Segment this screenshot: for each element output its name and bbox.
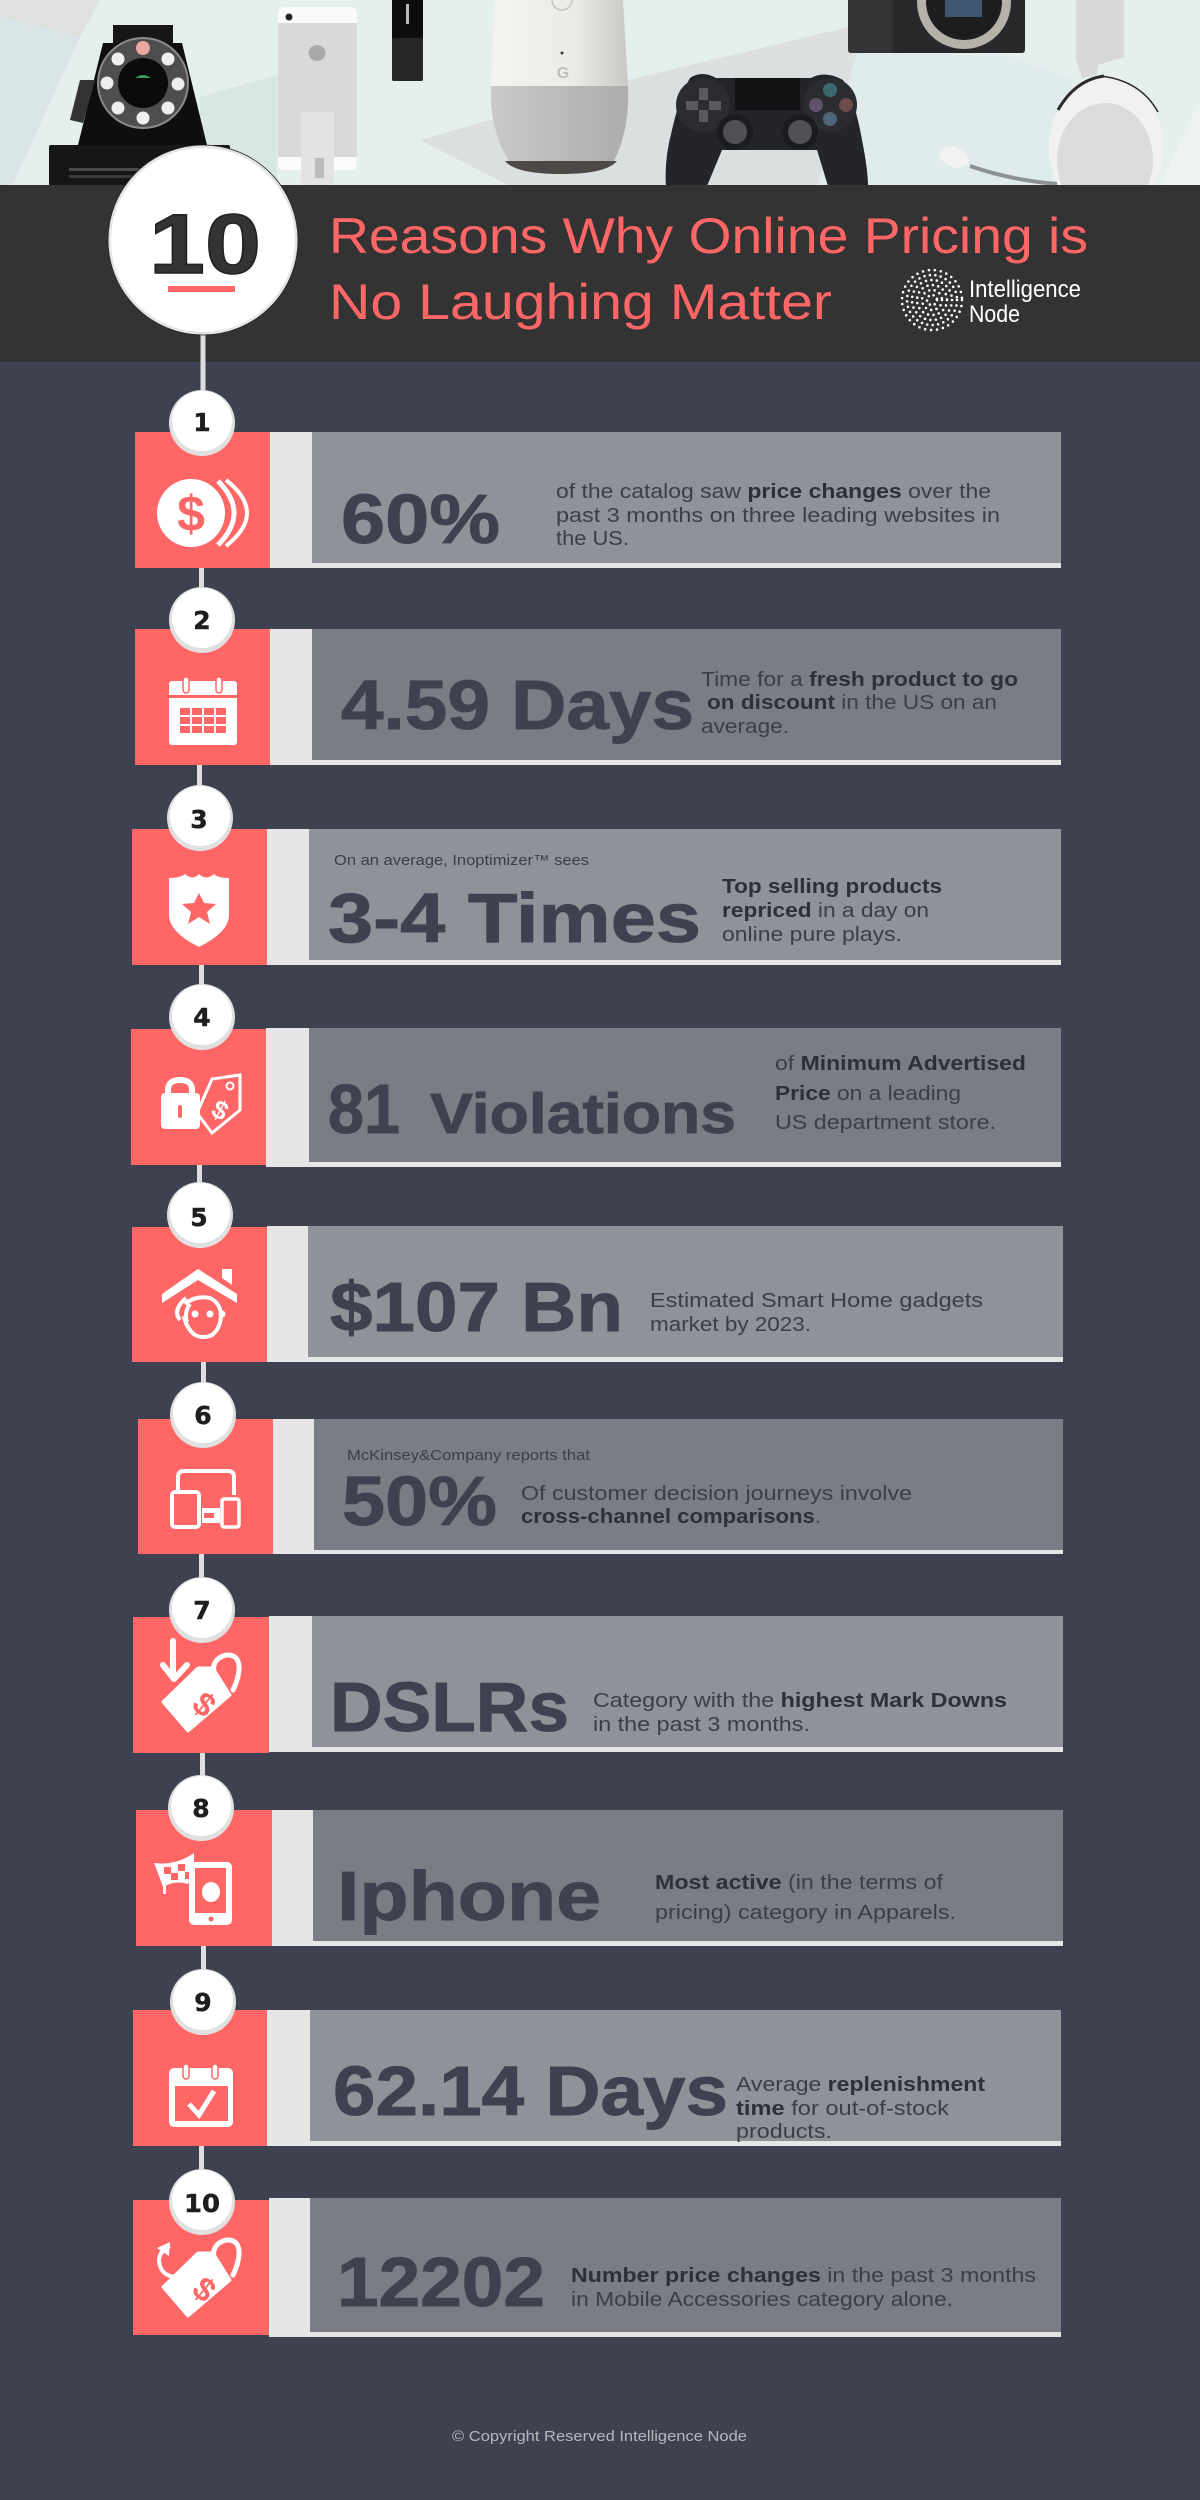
number badge 4: 4	[193, 1003, 211, 1032]
description	[593, 1689, 1007, 1736]
description: market by 2023.	[650, 1313, 811, 1336]
icon: calendar	[169, 677, 237, 745]
title	[329, 208, 1088, 330]
icon: devices	[172, 1471, 239, 1527]
description: Top selling products	[722, 875, 942, 898]
description: in the past 3 months.	[593, 1713, 810, 1736]
description: products.	[736, 2120, 832, 2143]
hero: product photo strip	[0, 0, 1200, 218]
icon: flag and phone	[154, 1853, 232, 1925]
product: smart speaker	[491, 0, 628, 174]
product: streaming stick	[392, 0, 423, 81]
stat: $107 Bn: $107 Bn	[330, 1268, 623, 1346]
product: instant camera	[49, 25, 230, 186]
description: Price on a leading	[775, 1082, 961, 1105]
icon: calendar with check	[169, 2064, 233, 2127]
icon: price tag with refresh arrow: $	[185, 2269, 223, 2309]
description	[521, 1482, 912, 1528]
description: time for out-of-stock	[736, 2097, 950, 2120]
panel 3: 3-4 times	[132, 829, 1061, 965]
description	[650, 1289, 983, 1336]
icon: coins: $	[177, 486, 205, 542]
number badge 2	[169, 587, 235, 653]
badge: big number 10	[108, 145, 298, 335]
stat: 60%: 60%	[341, 480, 500, 558]
number badge 9	[170, 1969, 236, 2035]
number badge 6: 6	[194, 1401, 212, 1430]
number badge 10: 10	[184, 2189, 220, 2218]
number badge 9: 9	[194, 1988, 212, 2017]
description: Time for a fresh product to go	[701, 668, 1018, 691]
description	[722, 875, 942, 946]
icon: coins	[157, 479, 247, 547]
number badge 6	[170, 1382, 236, 1448]
description: pricing) category in Apparels.	[655, 1901, 956, 1924]
description: of the catalog saw price changes over the	[556, 480, 991, 503]
description	[655, 1871, 956, 1924]
panel 4: 81 violations	[131, 1028, 1061, 1167]
icon: price tag with refresh arrow	[157, 2240, 239, 2316]
note: On an average, Inoptimizer™ sees	[334, 853, 589, 869]
description: average.	[701, 715, 789, 738]
stat: 3-4 Times: 3-4 Times	[328, 879, 701, 957]
panel 6: 50%	[138, 1419, 1063, 1554]
panel 9: 62.14 days	[133, 2010, 1061, 2146]
panel 10: 12202	[133, 2198, 1061, 2337]
description: Most active (in the terms of	[655, 1871, 943, 1894]
panel 5: $107 Bn	[132, 1226, 1063, 1362]
number badge 5	[167, 1182, 233, 1248]
number badge 7	[169, 1577, 235, 1643]
description: Number price changes in the past 3 months	[571, 2264, 1036, 2287]
product: smart speaker: G	[557, 65, 569, 82]
product: mirrorless camera	[848, 0, 1025, 53]
description	[775, 1052, 1026, 1134]
icon: price tag with down arrow: $	[185, 1684, 223, 1724]
description: US department store.	[775, 1111, 996, 1134]
logo: Intelligence Node: Intelligence	[969, 276, 1081, 303]
badge: big number 10: 10	[149, 197, 261, 291]
footer copyright: © Copyright Reserved Intelligence Node	[452, 2429, 747, 2445]
title: No Laughing Matter	[329, 274, 832, 330]
stat: 4.59 Days: 4.59 Days	[341, 666, 694, 744]
stat: 62.14 Days: 62.14 Days	[333, 2052, 728, 2130]
description: the US.	[556, 527, 629, 550]
stat: 81 Violations: Violations	[430, 1082, 736, 1146]
number badge 1	[169, 390, 235, 456]
stat: 81 Violations	[328, 1070, 736, 1148]
description: in Mobile Accessories category alone.	[571, 2288, 953, 2311]
number badge 1: 1	[193, 408, 211, 437]
icon: lock and price tag: $	[207, 1093, 234, 1127]
icon: lock and price tag	[161, 1075, 240, 1133]
product: white headset	[936, 0, 1163, 218]
description: Category with the highest Mark Downs	[593, 1689, 1007, 1712]
description	[701, 668, 1018, 738]
logo: Intelligence Node	[902, 270, 1081, 330]
number badge 3	[167, 785, 233, 851]
description	[736, 2073, 985, 2143]
panel 7: DSLRs	[133, 1616, 1063, 1753]
number badge 7: 7	[193, 1596, 211, 1625]
number badge 3: 3	[190, 805, 208, 834]
description: on discount in the US on an	[707, 691, 997, 714]
header band	[0, 185, 1200, 362]
icon: smart home with head	[162, 1269, 237, 1337]
panel 1: 60% price changes	[135, 432, 1061, 568]
description	[571, 2264, 1036, 2311]
description: of Minimum Advertised	[775, 1052, 1026, 1075]
note: McKinsey&Company reports that	[347, 1448, 590, 1464]
description: Of customer decision journeys involve	[521, 1482, 912, 1505]
description: cross-channel comparisons .	[521, 1505, 821, 1528]
icon: shield with star	[169, 874, 229, 947]
number badge 10	[169, 2169, 235, 2235]
product: game controller	[666, 74, 868, 186]
number badge 4	[169, 984, 235, 1050]
stat: 81 Violations: 81	[328, 1070, 400, 1148]
logo: Intelligence Node: Node	[969, 301, 1020, 328]
stat: 50%: 50%	[342, 1462, 497, 1540]
panel 8: Iphone	[136, 1810, 1063, 1946]
description: online pure plays.	[722, 923, 902, 946]
description: Average replenishment	[736, 2073, 985, 2096]
panel 2: 4.59 days	[135, 629, 1061, 765]
description: repriced in a day on	[722, 899, 929, 922]
number badge 5: 5	[190, 1203, 208, 1232]
title: Reasons Why Online Pricing is	[329, 208, 1088, 264]
description	[556, 480, 1000, 550]
product: silver smartphone on stand	[278, 7, 357, 186]
description: Estimated Smart Home gadgets	[650, 1289, 983, 1312]
icon: price tag with down arrow	[163, 1641, 239, 1731]
number badge 8	[168, 1775, 234, 1841]
stat: DSLRs: DSLRs	[330, 1668, 569, 1746]
number badge 8: 8	[192, 1794, 210, 1823]
connector lines	[197, 330, 206, 2172]
description: past 3 months on three leading websites in	[556, 504, 1000, 527]
stat: 12202: 12202	[337, 2243, 545, 2321]
stat: Iphone: Iphone	[337, 1857, 601, 1935]
number badge 2: 2	[193, 606, 211, 635]
